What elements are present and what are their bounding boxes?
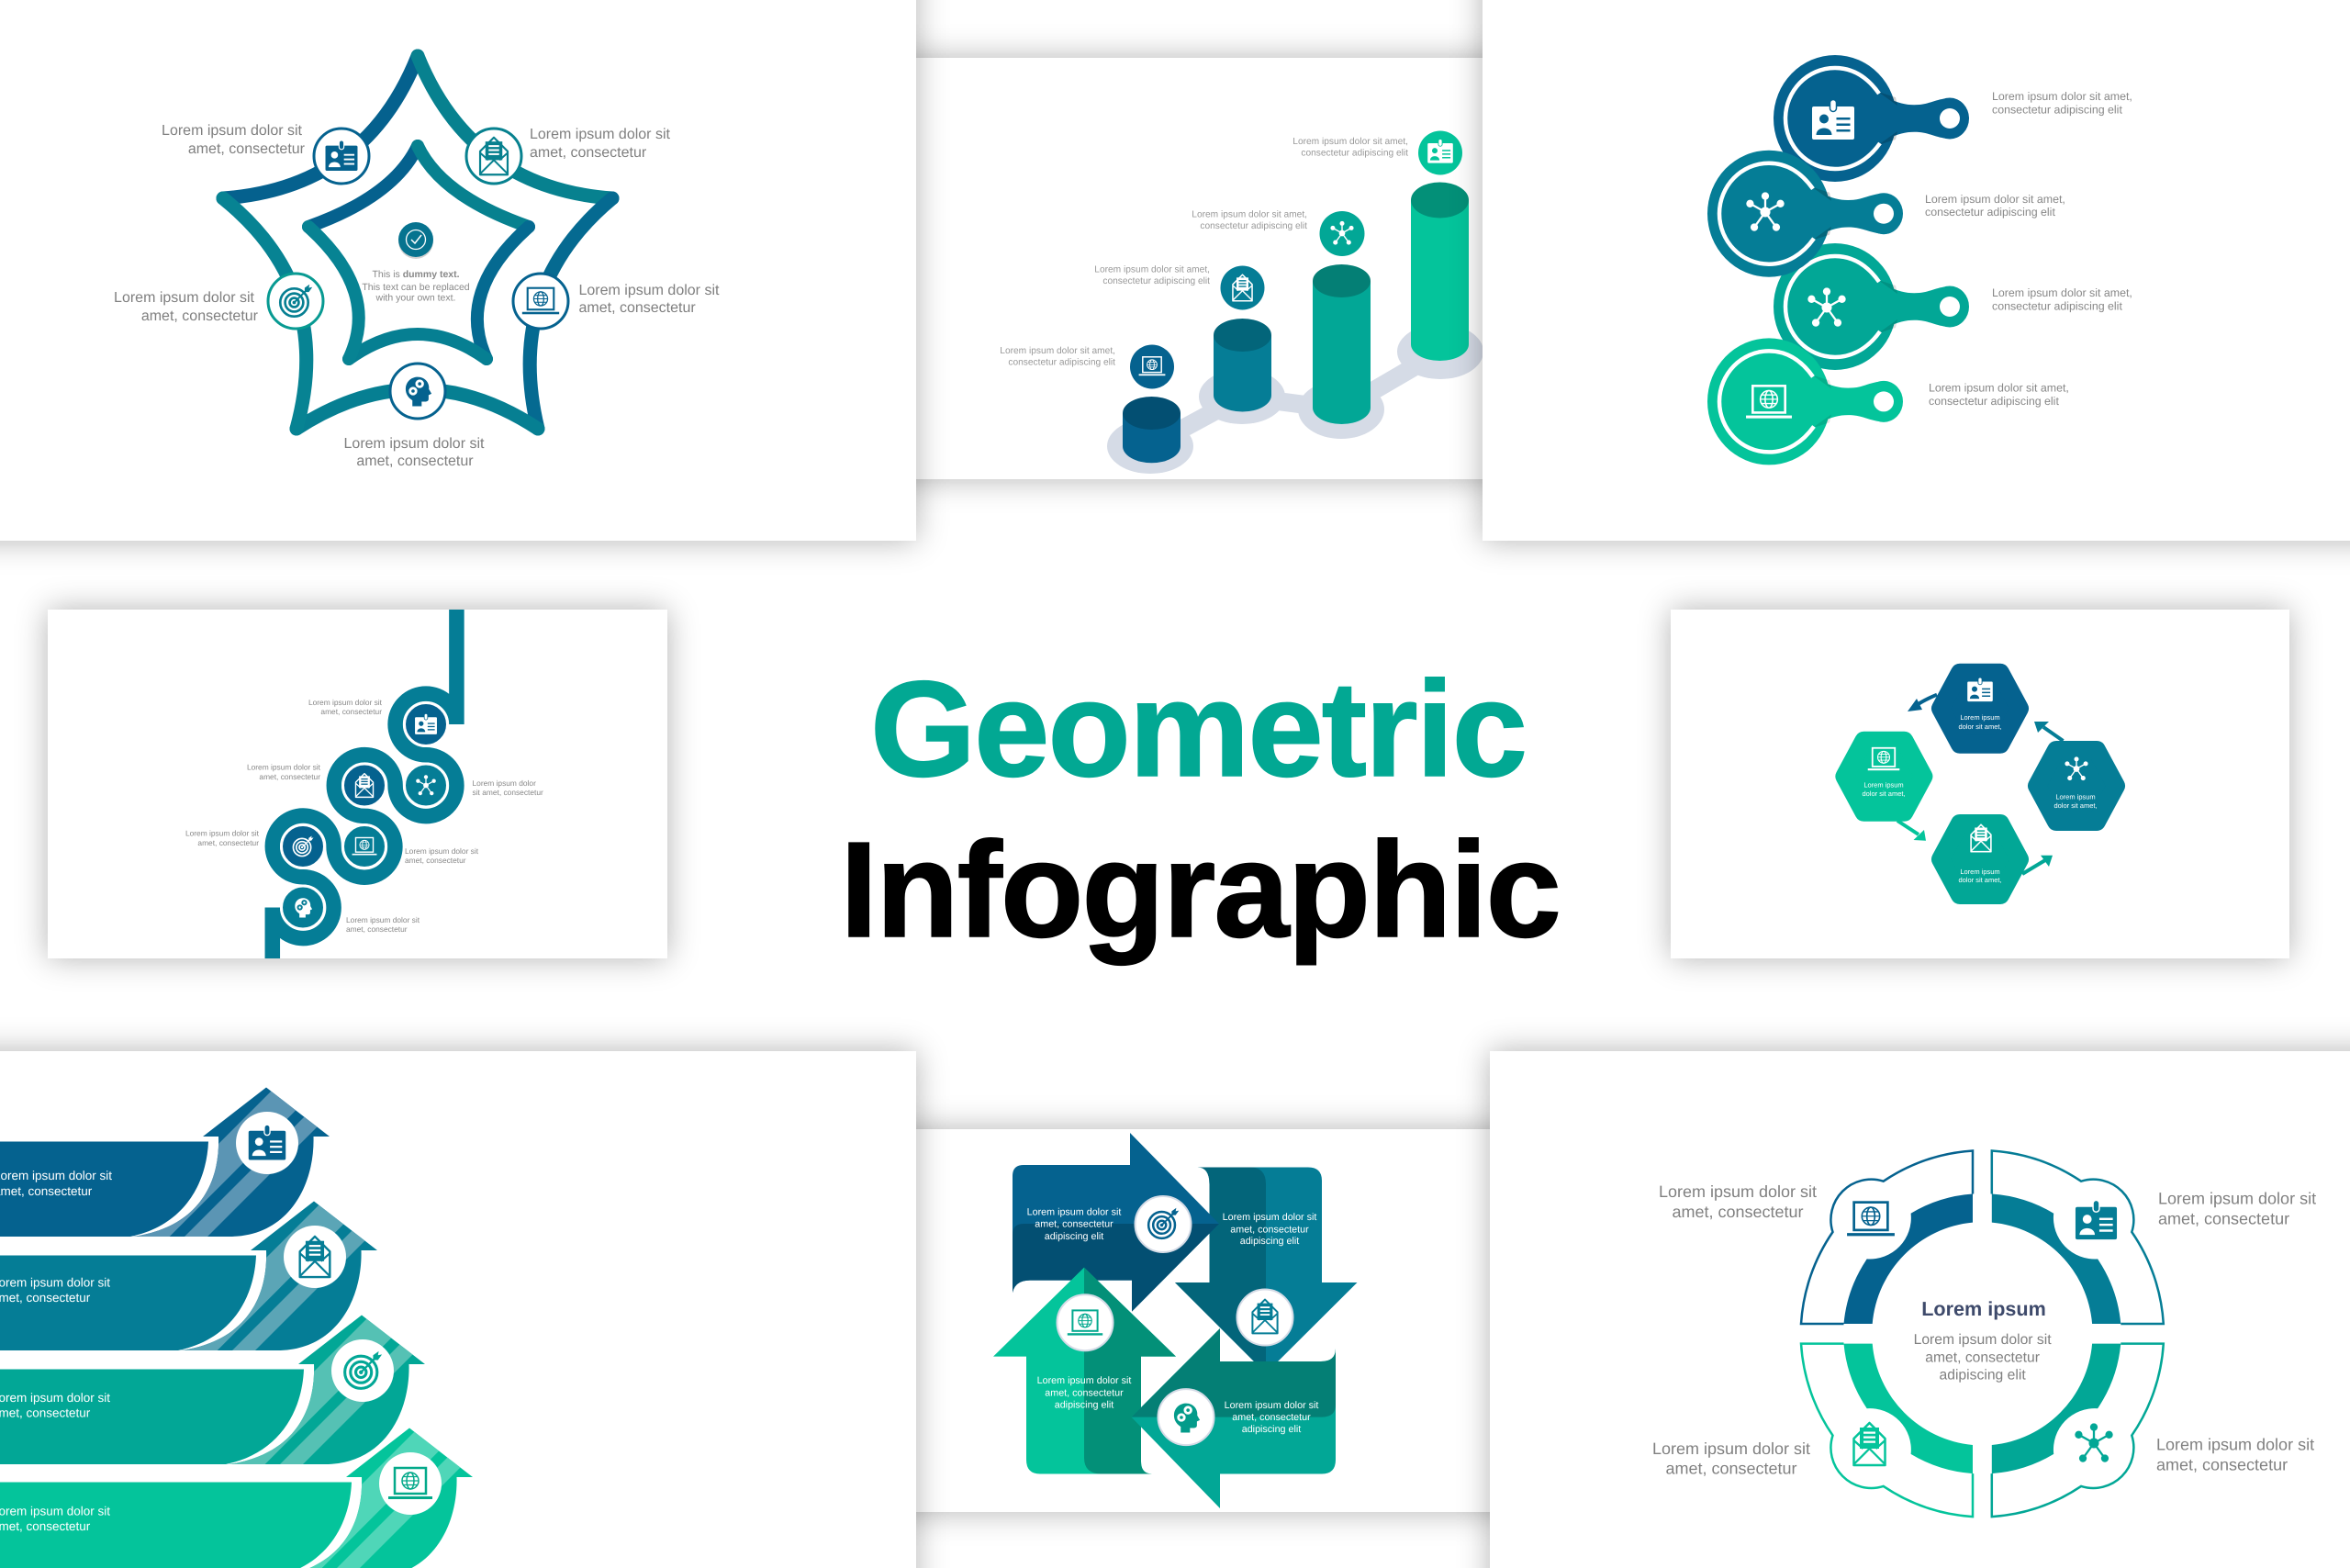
hexagon labels: Lorem ipsum [1960,868,2000,876]
cylinder labels: consectetur adipiscing elit [1200,221,1307,231]
icon: id card [314,129,369,184]
ring labels: amet, consectetur [1665,1460,1797,1478]
star labels: amet, consectetur [188,141,306,157]
arrow labels: amet, consectetur [1035,1219,1113,1230]
title [840,654,1560,966]
icon: target [281,824,325,868]
hexagon 3 [1941,823,2020,895]
hexagon labels: dolor sit amet, [2053,801,2098,810]
panel: bottom right ring diagram [1490,1051,2350,1568]
icon: laptop [1847,1203,1895,1236]
icon: head [281,886,325,929]
icon: network [404,764,448,807]
panel: bottom centre four arrows [881,1129,1524,1512]
keyhole 1 [1774,55,1969,182]
icon: envelope [466,129,521,184]
arrow labels: amet, consectetur [1230,1225,1309,1236]
cylinder 4 [1411,182,1469,361]
star labels: amet, consectetur [141,308,259,324]
keyhole labels: Lorem ipsum dolor sit amet, [1925,193,2065,206]
ring centre text: Lorem ipsum [1921,1297,2046,1320]
curved arrow 2 [0,1201,377,1350]
arrow labels: Lorem ipsum dolor sit [1225,1400,1318,1411]
keyhole labels: consectetur adipiscing elit [1992,103,2122,116]
hexagon labels: dolor sit amet, [1958,722,2002,731]
icon: network [1807,287,1846,327]
snake labels: amet, consectetur [346,924,408,934]
keyhole labels: consectetur adipiscing elit [1929,395,2059,408]
ring quadrant top right [1992,1151,2164,1324]
icon: envelope badge [1221,266,1265,310]
hexagon labels [1862,713,2098,884]
snake labels: Lorem ipsum dolor sit [247,762,321,771]
cylinder labels: Lorem ipsum dolor sit amet, [1000,346,1115,356]
icon: id card [1812,99,1854,140]
ring centre text: Lorem ipsum dolor sit [1914,1332,2052,1348]
curved arrow 1 [0,1087,330,1237]
cylinder labels: consectetur adipiscing elit [1008,358,1115,367]
icon: head [390,364,445,419]
star labels: amet, consectetur [356,454,474,469]
icon: envelope [1237,1289,1292,1346]
icon: laptop badge [1130,345,1174,389]
ring centre text: adipiscing elit [1940,1368,2026,1383]
icon: id card badge [1418,130,1462,174]
centre text [362,269,470,303]
arrow labels: Lorem ipsum dolor sit [1223,1212,1316,1223]
snake labels: Lorem ipsum dolor sit [405,846,479,856]
ring labels: Lorem ipsum dolor sit [2158,1190,2316,1208]
arrow labels: adipiscing elit [1045,1231,1103,1242]
base track under cylinders [1107,324,1483,474]
ring labels: amet, consectetur [2156,1456,2288,1474]
hexagon labels: Lorem ipsum [1960,713,2000,722]
arrow labels: adipiscing elit [1242,1424,1301,1435]
icon: check badge [398,222,433,259]
inner star [308,146,529,359]
centre text: This text can be replaced [362,282,470,293]
snake labels: Lorem ipsum dolor sit [308,698,383,707]
ring labels: amet, consectetur [2158,1210,2289,1228]
snake labels: amet, consectetur [259,772,320,781]
cylinder labels: Lorem ipsum dolor sit amet, [1292,137,1408,147]
panel: top left star diagram [0,0,916,541]
snake labels: Lorem ipsum dolor sit [346,915,420,924]
ring labels: Lorem ipsum dolor sit [2156,1436,2314,1454]
icon: id card [404,703,448,745]
star labels: amet, consectetur [578,300,696,316]
arrow labels: amet, consectetur [1232,1412,1311,1423]
arrow labels: Lorem ipsum dolor sit [1037,1375,1131,1386]
icon: envelope [343,764,386,807]
arrow labels: adipiscing elit [1240,1236,1299,1247]
ring centre text [1914,1297,2052,1383]
hexagon labels: dolor sit amet, [1958,876,2002,884]
left arrow [1131,1328,1336,1508]
ring labels: Lorem ipsum dolor sit [1659,1182,1817,1201]
hexagon labels: Lorem ipsum [1863,780,1904,790]
keyhole 2 [1707,151,1903,277]
curved arrow 3 [0,1315,425,1464]
ring labels: amet, consectetur [1672,1203,1804,1221]
hexagon 2 [2037,750,2116,822]
cylinder labels: consectetur adipiscing elit [1301,149,1408,158]
curved arrow 4 [0,1428,473,1568]
cylinder 3 [1313,264,1371,424]
cylinder 1 [1123,397,1181,463]
ring labels [1652,1182,2316,1478]
arrow: hexagon 2 to 1 [2034,722,2064,741]
panel: top centre cylinder chart [881,58,1524,479]
star labels: amet, consectetur [530,145,647,161]
arrow: hexagon 1 to 4 [1908,695,1937,711]
cylinder labels: Lorem ipsum dolor sit amet, [1094,264,1210,275]
ring quadrant bottom right [1992,1344,2164,1517]
title word: Infographic: Infographic [840,814,1560,966]
title word: Geometric: Geometric [870,654,1526,805]
icon: target [268,274,323,329]
icon: target [1135,1196,1192,1252]
icon: id card [2076,1200,2117,1239]
star labels: Lorem ipsum dolor sit [162,123,303,139]
snake path [273,606,456,962]
snake labels [185,698,543,934]
panel: bottom left curved up arrows [0,1051,916,1568]
hexagon 4 [1844,741,1923,812]
cylinder 2 [1214,319,1271,411]
keyhole labels [1925,90,2132,408]
ring quadrant top left [1801,1151,1973,1324]
keyhole labels: consectetur adipiscing elit [1992,299,2122,312]
star labels: Lorem ipsum dolor sit [530,127,670,142]
icon: network [2075,1423,2113,1462]
star labels [114,123,720,469]
star labels: Lorem ipsum dolor sit [344,436,485,452]
hexagon labels: dolor sit amet, [1862,790,1906,798]
arrow: hexagon 3 to 2 [2022,856,2053,874]
icon: laptop [1746,386,1792,419]
cylinder labels [1000,137,1408,367]
arrow labels: amet, consectetur [1045,1388,1124,1399]
icon: laptop [513,274,568,329]
keyhole labels: Lorem ipsum dolor sit amet, [1929,382,2069,395]
snake labels: amet, consectetur [320,707,382,716]
cylinder labels: Lorem ipsum dolor sit amet, [1192,210,1307,220]
keyhole labels: Lorem ipsum dolor sit amet, [1992,286,2132,299]
keyhole 3 [1774,243,1969,370]
panel: middle right hexagon cycle [1671,610,2289,958]
snake labels: Lorem ipsum dolor [472,778,536,788]
centre text: with your own text. [375,292,455,303]
ring quadrant bottom left [1801,1344,1973,1517]
keyhole labels: consectetur adipiscing elit [1925,206,2055,218]
arrow labels: adipiscing elit [1055,1399,1113,1410]
icon: laptop [343,824,386,868]
right arrow [1013,1133,1219,1312]
up arrow [993,1268,1176,1474]
panel: middle left snake diagram [48,610,667,958]
arrow: hexagon 4 to 3 [1897,821,1926,841]
down arrow [1175,1168,1357,1373]
ring labels: Lorem ipsum dolor sit [1652,1439,1810,1458]
icon: laptop [1058,1294,1113,1350]
snake labels: sit amet, consectetur [472,788,543,797]
centre text: This is dummy text. [372,269,460,280]
snake labels: Lorem ipsum dolor sit [185,828,260,837]
icon: network [1746,192,1785,231]
arrow labels: Lorem ipsum dolor sit [1027,1206,1121,1217]
cylinder labels: consectetur adipiscing elit [1102,276,1210,286]
panel: top right keyhole list [1483,0,2350,541]
icon: envelope [1854,1423,1886,1465]
icon: head [1158,1389,1214,1445]
hexagon 1 [1941,673,2020,745]
star labels: Lorem ipsum dolor sit [114,290,255,306]
icon: network badge [1320,211,1364,256]
keyhole labels: Lorem ipsum dolor sit amet, [1992,90,2132,103]
arrow labels [1027,1206,1318,1435]
snake labels: amet, consectetur [405,856,466,865]
ring centre text: amet, consectetur [1925,1350,2040,1366]
star labels: Lorem ipsum dolor sit [578,283,720,298]
snake labels: amet, consectetur [197,838,259,847]
hexagon labels: Lorem ipsum [2055,793,2096,801]
keyhole 4 [1707,338,1903,465]
outer star [223,56,612,429]
